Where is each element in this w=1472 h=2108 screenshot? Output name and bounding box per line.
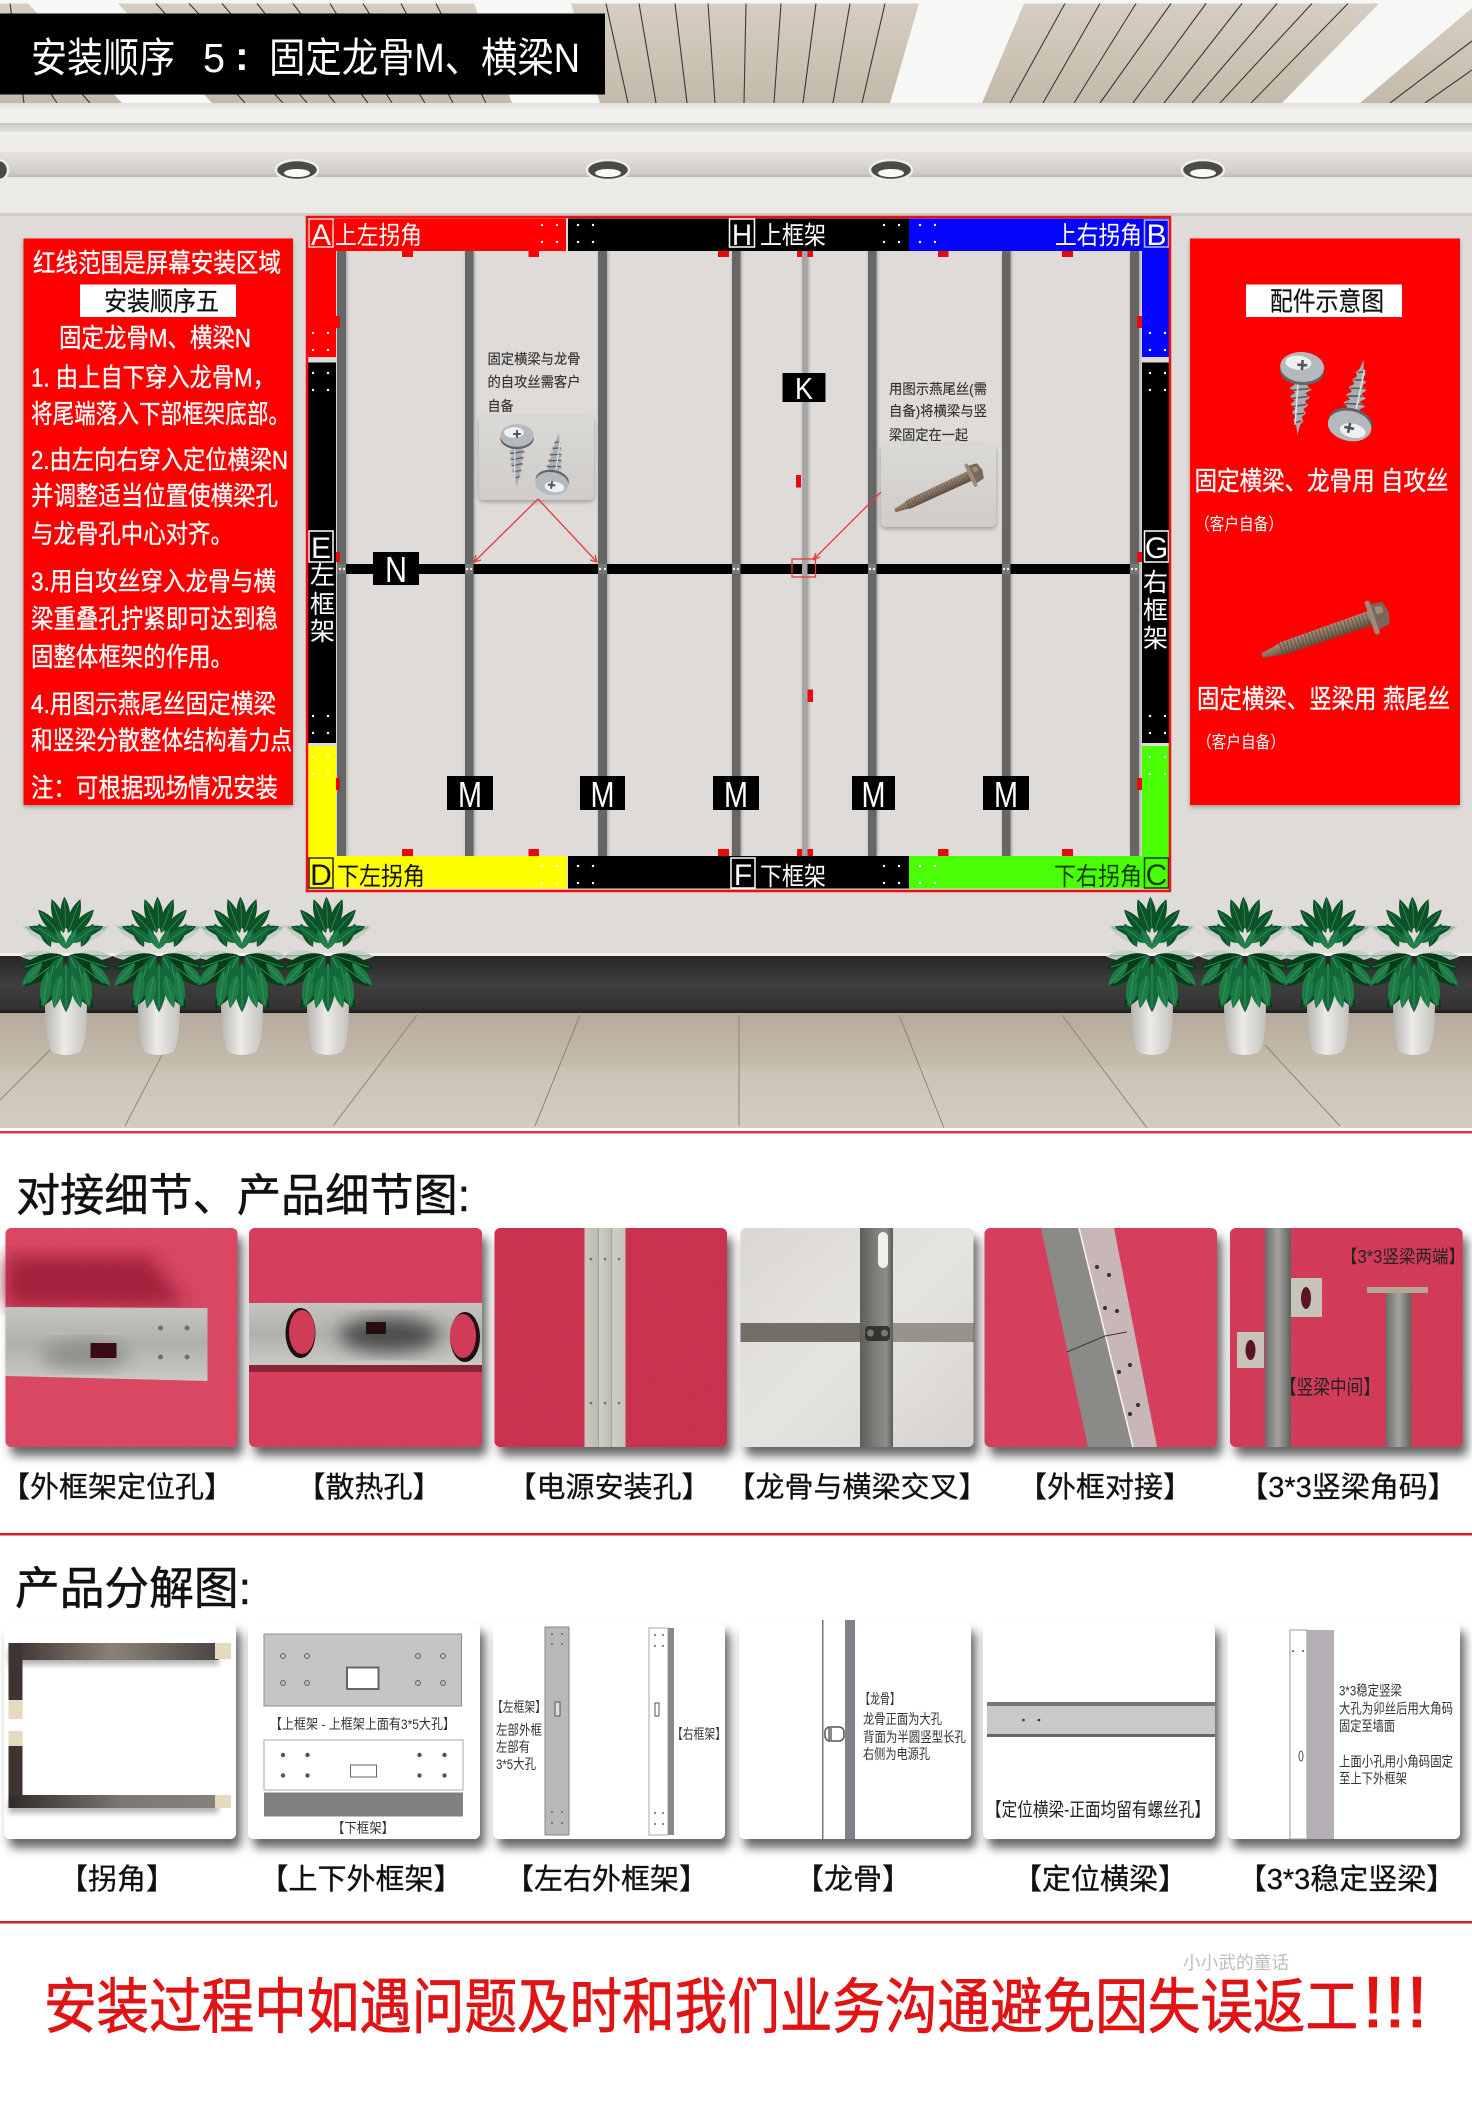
labels M <box>447 774 1029 815</box>
exploded view captions: 【定位横梁】 <box>1013 1863 1187 1896</box>
exploded view captions: 【3*3稳定竖梁】 <box>1238 1863 1455 1896</box>
outer red boundary <box>307 217 1170 891</box>
panel: installation steps: 固整体框架的作用。 <box>31 642 233 672</box>
screw hole dots <box>312 224 1166 884</box>
frame: left bar E: E <box>311 532 331 565</box>
installation frame diagram <box>307 217 1170 892</box>
labels M: M <box>458 774 482 815</box>
crossbeam N <box>337 564 1139 574</box>
panel: detail photo 5 <box>984 1228 1217 1447</box>
panel: installation steps <box>24 238 293 805</box>
frame: top bar H: 上框架 <box>760 222 826 250</box>
labels M: M <box>724 774 748 815</box>
panel: accessories <box>1190 238 1460 805</box>
panel: detail photo 4 <box>740 1228 974 1447</box>
panel: stabilizing column: 至上下外框架 <box>1339 1770 1407 1786</box>
detail captions: 【电源安装孔】 <box>507 1471 711 1504</box>
frame: top-left corner A: A <box>311 219 331 252</box>
frame: top bar H <box>568 218 909 252</box>
callout: dovetail screw note: 用图示燕尾丝(需 <box>889 381 987 397</box>
frame: bottom-right corner C: 下右拐角 <box>1054 863 1142 891</box>
panel: left and right frame <box>492 1622 726 1839</box>
frame: bottom bar F: 下框架 <box>760 863 826 891</box>
step heading box: 安装顺序五 <box>104 286 219 316</box>
frame: bottom-left corner D <box>308 746 567 892</box>
detail captions <box>1 1471 1457 1504</box>
detail captions: 【外框对接】 <box>1018 1471 1192 1504</box>
panel: keel <box>739 1620 971 1839</box>
detail captions: 【龙骨与横梁交叉】 <box>726 1471 988 1504</box>
ceiling trim and soffit <box>0 103 1472 216</box>
label K <box>782 371 826 406</box>
panel: top and bottom frame: 【下框架】 <box>332 1820 394 1836</box>
exploded view captions: 【左右外框架】 <box>505 1863 708 1896</box>
frame: left bar E: 左 <box>310 562 335 590</box>
divider under scene <box>0 1131 1472 1134</box>
frame: bottom-right corner C <box>909 746 1169 892</box>
callout: dovetail screw note: 自备)将横梁与竖 <box>889 403 987 419</box>
frame: top-right corner B <box>909 218 1169 357</box>
label K: K <box>795 371 813 406</box>
labels M: M <box>994 774 1018 815</box>
panel: installation steps: 红线范围是屏幕安装区域 <box>33 248 281 278</box>
plants left <box>18 896 376 1055</box>
panel: keel: 右侧为电源孔 <box>863 1746 930 1762</box>
plants right <box>1104 896 1462 1055</box>
arrow to dovetail position <box>813 492 881 560</box>
panel: detail photo 3 <box>494 1228 727 1447</box>
footer warning: !!! <box>1362 1963 1428 2043</box>
frame: bottom-left corner D: 下左拐角 <box>337 863 425 891</box>
vertical keels <box>337 251 1139 856</box>
frame: bottom bar F <box>568 856 909 892</box>
frame: bottom-right corner C: C <box>1146 859 1167 892</box>
callout: dovetail screw note <box>881 381 996 527</box>
frame: top-right corner B: 上右拐角 <box>1055 222 1142 250</box>
panel: installation steps: 4.用图示燕尾丝固定横梁 <box>31 689 276 719</box>
label N: N <box>385 549 407 590</box>
watermark: 小小武的童话 <box>1183 1953 1289 1973</box>
panel: stabilizing column <box>1228 1622 1460 1839</box>
centre column segment on crossbeam <box>802 564 808 574</box>
labels M: M <box>862 774 886 815</box>
exploded view captions: 【拐角】 <box>59 1863 175 1896</box>
arrows to crossing points <box>474 499 597 562</box>
accessories heading: 配件示意图 <box>1270 286 1384 316</box>
icon: dovetail screw <box>1256 595 1394 672</box>
panel: left and right frame: 左部外框 <box>496 1722 542 1738</box>
frame: bottom bar F: F <box>734 859 752 892</box>
panel: left and right frame: 【左框架】 <box>492 1699 546 1715</box>
title bar: 安装顺序 <box>31 35 175 81</box>
callout: self-tapping screw note: 自备 <box>488 398 514 414</box>
panel: stabilizing column: 3*3稳定竖梁 <box>1339 1682 1402 1698</box>
callout: self-tapping screw note: 固定横梁与龙骨 <box>488 351 580 367</box>
frame: right bar G <box>1142 362 1169 743</box>
exploded view captions: 【龙骨】 <box>795 1863 911 1896</box>
panel: keel: 龙骨正面为大孔 <box>863 1711 942 1727</box>
panel: installation steps: 和竖梁分散整体结构着力点 <box>31 726 292 756</box>
wall <box>0 216 1472 954</box>
title bar: 固定龙骨M、横梁N <box>269 35 580 81</box>
frame: top-right corner B: B <box>1146 219 1167 252</box>
panel: installation steps: 1. 由上自下穿入龙骨M， <box>31 362 275 392</box>
panel: keel: 【龙骨】 <box>860 1691 900 1707</box>
panel: accessories: （客户自备） <box>1195 515 1283 534</box>
red highlight box <box>792 559 816 577</box>
frame: top-left corner A: 上左拐角 <box>335 222 422 250</box>
panel: positioning crossbeam <box>983 1622 1215 1839</box>
frame: right bar G: 架 <box>1143 625 1168 653</box>
panel: installation steps: 将尾端落入下部框架底部。 <box>31 399 290 429</box>
panel: installation steps: 梁重叠孔拧紧即可达到稳 <box>31 604 278 634</box>
frame: left bar E <box>308 362 336 743</box>
label N <box>373 549 419 590</box>
showroom scene background <box>0 0 1472 1128</box>
baseboard <box>0 953 1472 1013</box>
panel: detail photo 1 <box>6 1228 238 1447</box>
detail captions: 【散热孔】 <box>296 1471 442 1504</box>
frame: left bar E: 框 <box>310 591 335 619</box>
panel: left and right frame: 左部有 <box>496 1739 530 1755</box>
panel: keel: 背面为半圆竖型长孔 <box>863 1729 966 1745</box>
ceiling planks <box>0 0 1472 110</box>
panel: detail photo 6: 【3*3竖梁两端】 <box>1341 1247 1465 1267</box>
exploded view captions: 【上下外框架】 <box>259 1863 463 1896</box>
panel: left and right frame: 【右框架】 <box>672 1726 726 1742</box>
frame: top-left corner A <box>308 218 566 357</box>
divider <box>0 1533 1472 1536</box>
frame: left bar E: 架 <box>310 618 335 646</box>
callout: dovetail screw note: 梁固定在一起 <box>889 427 968 443</box>
labels M: M <box>590 774 614 815</box>
exploded view captions <box>59 1863 1455 1896</box>
panel: installation steps: 3.用自攻丝穿入龙骨与横 <box>31 566 276 596</box>
frame: top bar H: H <box>732 219 752 252</box>
panel: left and right frame: 3*5大孔 <box>496 1756 536 1772</box>
panel: stabilizing column: 固定至墙面 <box>1339 1718 1395 1734</box>
callout: self-tapping screw note: 的自攻丝需客户 <box>488 374 580 390</box>
panel: installation steps: 固定龙骨M、横梁N <box>59 323 251 353</box>
panel: installation steps: 注：可根据现场情况安装 <box>31 773 278 803</box>
downlights <box>0 160 1224 180</box>
icon: self-tapping screws <box>1275 351 1385 445</box>
heading: docking and product details: 对接细节、产品细节图: <box>16 1170 470 1221</box>
panel: corner piece <box>4 1622 236 1839</box>
panel: installation steps: 并调整适当位置使横梁孔 <box>31 481 278 511</box>
callout: self-tapping screw note <box>479 351 594 500</box>
detail captions: 【外框架定位孔】 <box>1 1471 233 1504</box>
divider <box>0 1921 1472 1924</box>
title bar <box>0 14 605 94</box>
panel: detail photo 2 <box>249 1228 482 1447</box>
panel: top and bottom frame: 【上框架 - 上框架上面有3*5大孔】 <box>270 1716 455 1732</box>
panel: installation steps: 2.由左向右穿入定位横梁N <box>31 445 288 475</box>
frame: right bar G: 右 <box>1143 569 1168 597</box>
floor tiles <box>0 1013 1472 1128</box>
panel: detail photo 6 <box>1230 1228 1465 1447</box>
panel: accessories: （客户自备） <box>1197 733 1285 752</box>
title bar: 5 <box>203 35 225 81</box>
frame: right bar G: G <box>1145 532 1168 565</box>
panel: positioning crossbeam: 【定位横梁-正面均留有螺丝孔】 <box>986 1799 1210 1821</box>
red alignment ticks <box>336 251 1142 856</box>
panel: installation steps: 与龙骨孔中心对齐。 <box>31 519 233 549</box>
title bar: : <box>235 33 249 79</box>
frame: bottom-left corner D: D <box>310 859 332 892</box>
detail captions: 【3*3竖梁角码】 <box>1239 1471 1457 1504</box>
panel: top and bottom frame <box>248 1622 480 1839</box>
heading: exploded view: 产品分解图: <box>15 1563 251 1614</box>
frame: right bar G: 框 <box>1143 597 1168 625</box>
panel: detail photo 6: 【竖梁中间】 <box>1280 1376 1380 1399</box>
